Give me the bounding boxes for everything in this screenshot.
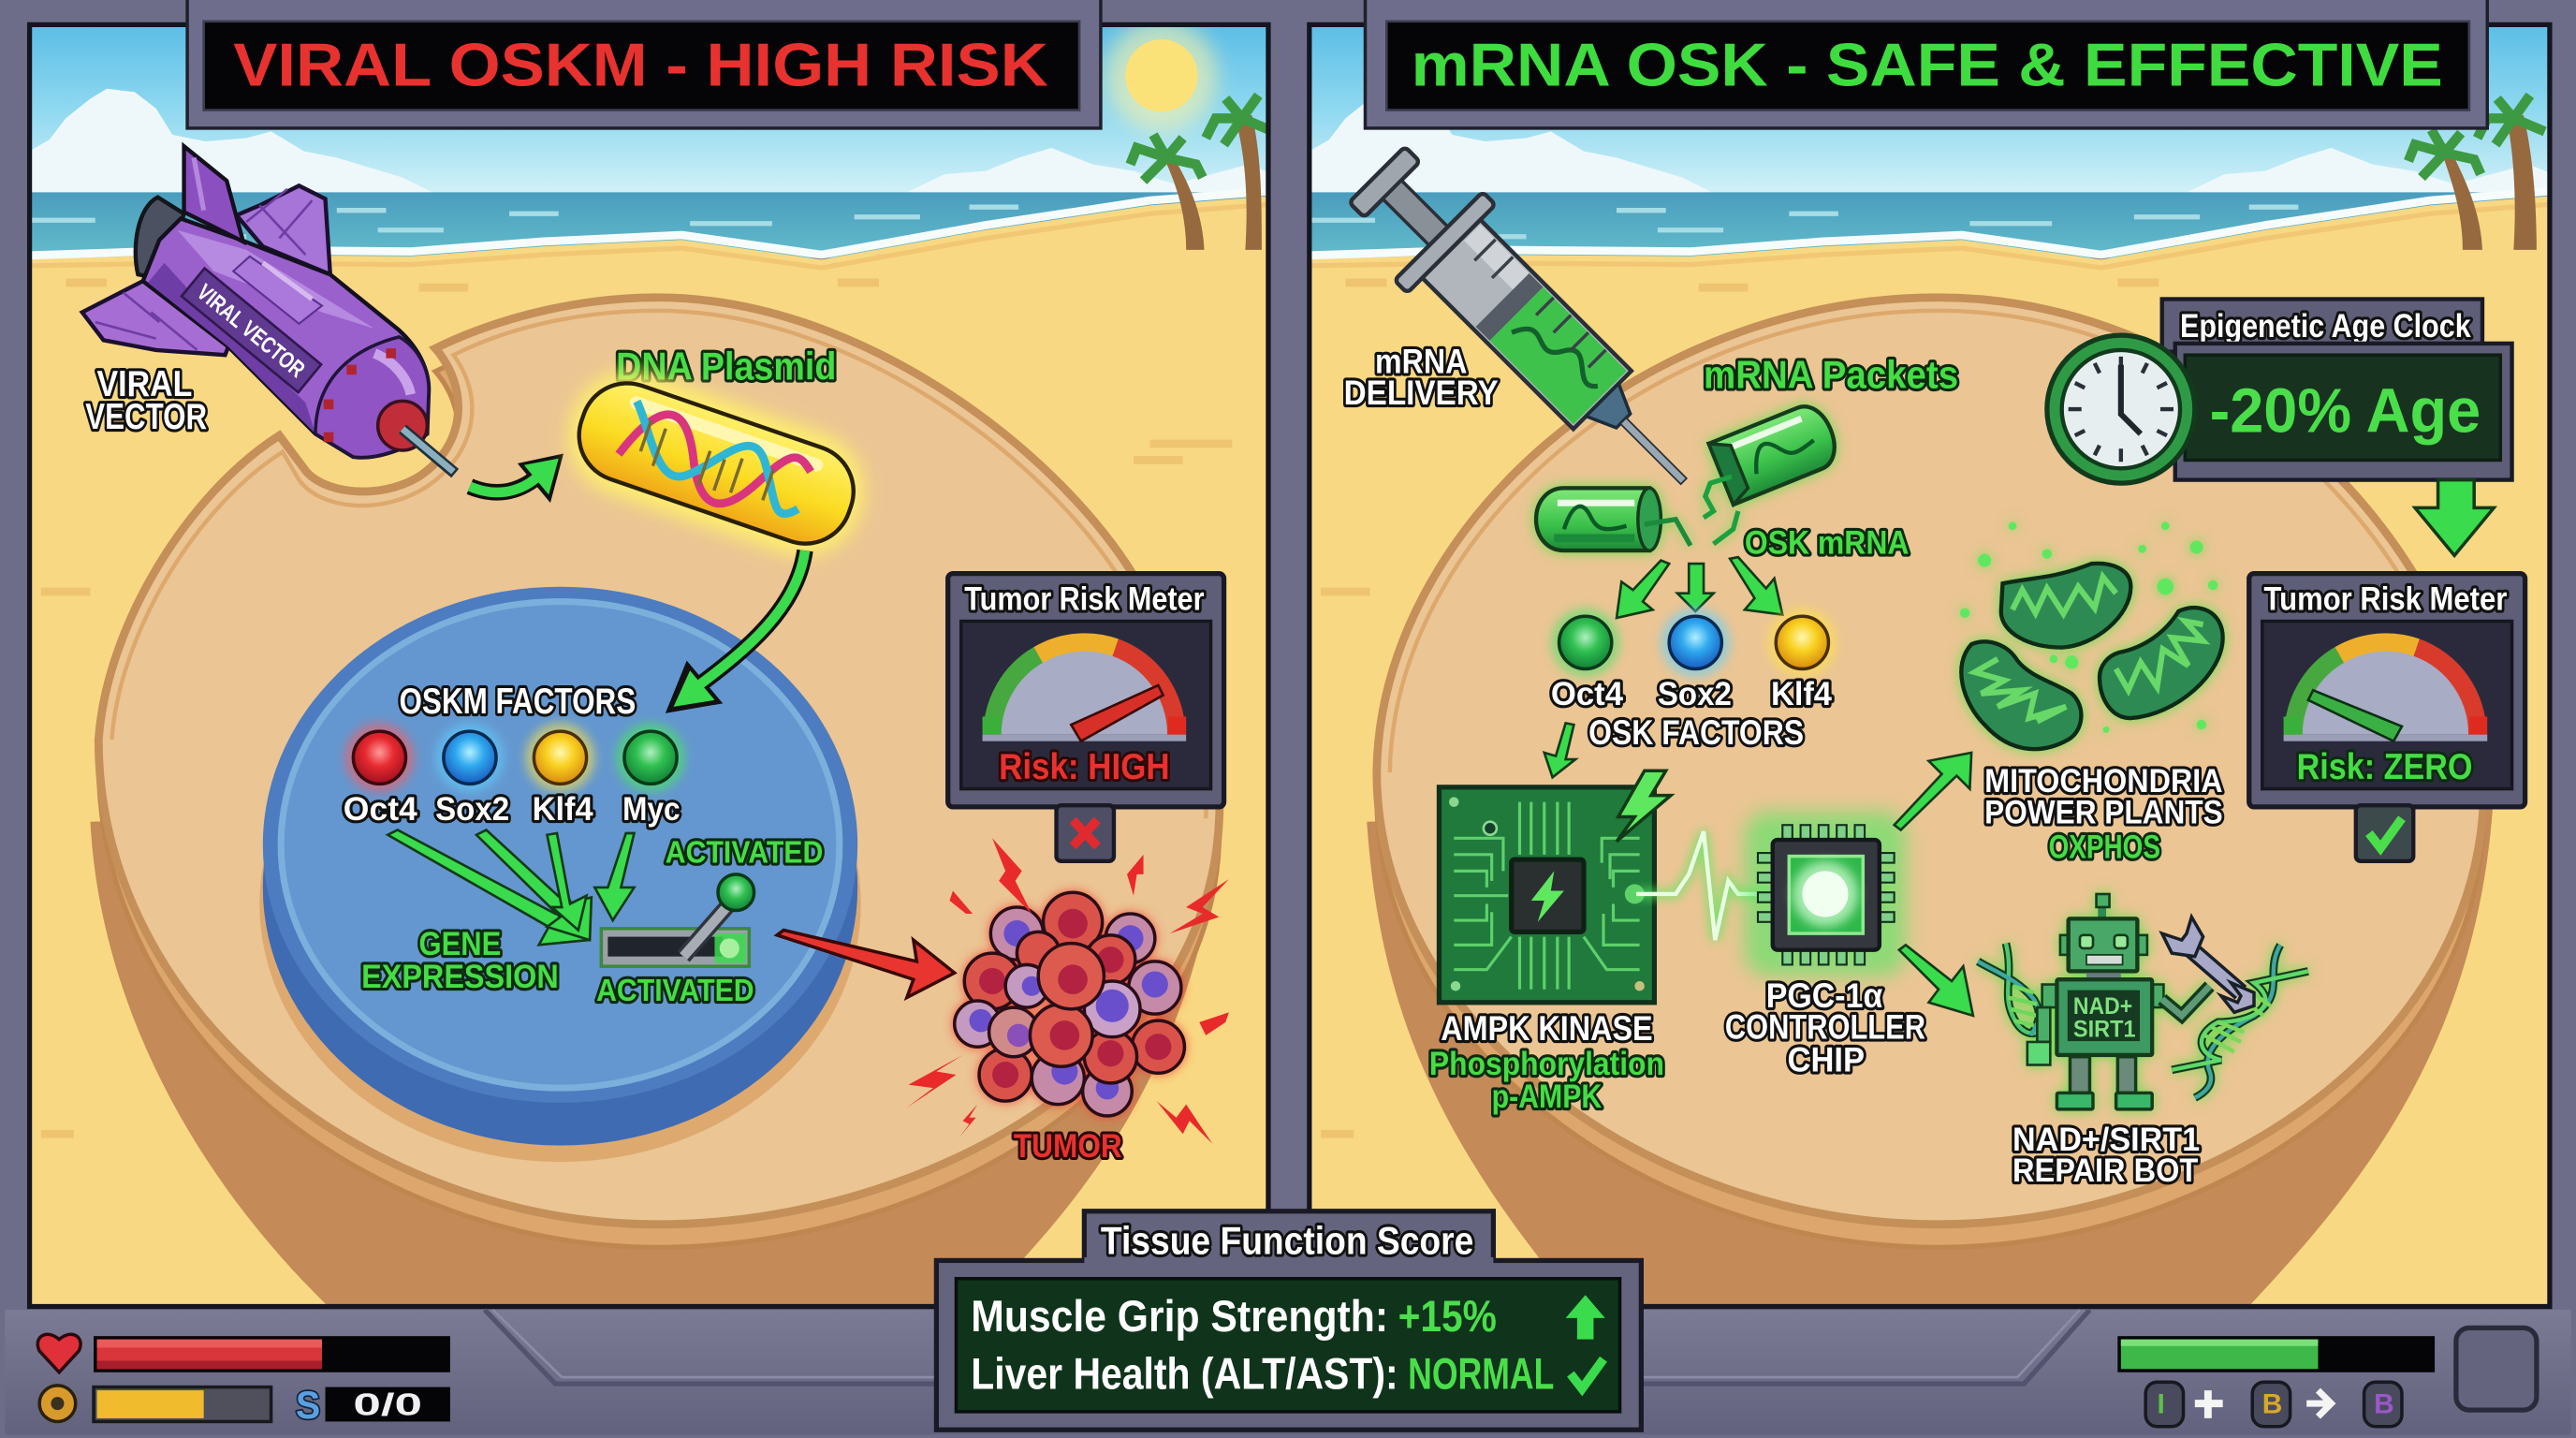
counter: 0/0 [353,1387,422,1422]
liver health row: NORMAL [1408,1349,1554,1399]
counter [326,1387,450,1422]
label: viral vector: VIRAL [97,364,192,404]
energy sparkles [1960,521,2217,733]
icon: tumor cluster [955,892,1184,1116]
labels: mitochondria [1984,763,2223,865]
input buttons: I [2157,1389,2165,1420]
OSK factor names: Klf4 [1771,676,1832,712]
beach backdrop left [0,0,1298,1314]
icon: syringe [1333,130,1728,525]
liver health row: Liver Health (ALT/AST): [971,1349,1398,1399]
cell shadow crescent right [1367,789,2494,1314]
arrows: factors to switch [388,829,634,945]
icon: red X badge [1057,805,1114,861]
factor names: Myc [622,791,681,828]
gauge zero [2284,642,2487,741]
icon: viral vector rocket [82,146,455,474]
panel: epigenetic age clock [2162,299,2512,480]
arrow: plasmid to nucleus [666,550,805,713]
icon: green check badge [2356,805,2413,861]
rocket nozzle [378,401,455,474]
label: viral vector: VECTOR [85,397,207,437]
icon: sun [1105,20,1218,131]
label: mRNA delivery: mRNA [1375,342,1467,380]
chest label: SIRT1 [2073,1018,2136,1043]
clock heading: Epigenetic Age Clock [2180,308,2471,345]
score heading: Tissue Function Score [1101,1218,1473,1262]
cell membrane [98,298,1220,1247]
meter title: Tumor Risk Meter [964,580,1205,617]
factor names: Klf4 [533,791,593,828]
label: tumor: TUMOR [1014,1128,1122,1165]
meter title right: Tumor Risk Meter [2264,580,2508,617]
title text: mRNA OSK - SAFE & EFFECTIVE [1412,30,2443,98]
labels: AMPK kinase [1429,1009,1664,1115]
label: DNA plasmid: DNA Plasmid [616,345,836,389]
beach backdrop right [1280,0,2576,1314]
labels: repair bot: NAD+/SIRT1 [2012,1122,2200,1158]
nucleus [259,587,861,1162]
panel: tumor risk meter zero [2249,574,2525,807]
factor names [344,791,681,828]
heading: OSKM factors: OSKM FACTORS [399,682,636,722]
OSK factor names [1551,676,1832,752]
labels: mitochondria: POWER PLANTS [1984,794,2223,830]
panel: mRNA OSK scene [1280,0,2576,1314]
icon: clock [2047,335,2195,483]
label: OSK mRNA: OSK mRNA [1745,525,1909,562]
icon: mRNA capsules [1536,400,1843,550]
labels: PGC-1 alpha controller chip: PGC-1α [1766,976,1883,1015]
labels: mitochondria: MITOCHONDRIA [1984,763,2223,800]
risk readout: Risk: HIGH [999,747,1170,787]
OSK factor orbs [1551,609,1837,677]
label: mRNA delivery: DELIVERY [1344,374,1499,412]
arrow: factors to AMPK [1544,723,1575,777]
chest label: NAD+ [2073,994,2132,1020]
panel: viral OSKM scene [0,0,1298,1314]
labels: AMPK kinase: Phosphorylation [1429,1046,1664,1082]
panel: tumor risk meter high [948,574,1224,807]
rocket hull label [182,269,321,392]
icon: PGC-1 alpha chip [1745,812,1906,976]
gauge high [983,642,1186,741]
labels: AMPK kinase: p-AMPK [1492,1078,1603,1115]
labels: PGC-1 alpha controller chip: CONTROLLER [1725,1007,1925,1046]
OSK factor names: OSK FACTORS [1588,713,1804,752]
icon: gene switch [601,874,754,966]
factor names: Sox2 [435,791,509,828]
label: mRNA delivery [1344,342,1499,412]
icon: repair robot [1978,894,2308,1109]
title text: VIRAL OSKM - HIGH RISK [233,30,1048,98]
icon: AMPK circuit board [1439,787,1654,1003]
input buttons: B [2262,1389,2282,1420]
cell membrane right [1377,298,2484,1247]
label: mRNA packets: mRNA Packets [1704,352,1958,396]
input buttons [2145,1382,2402,1427]
panel: tissue function score [936,1211,1641,1430]
grip strength row: Muscle Grip Strength: [971,1292,1388,1342]
icon: red sparks [907,838,1229,1144]
icon: mitochondria [1960,521,2223,749]
OSKM factor orbs [345,723,685,792]
age readout: -20% Age [2210,377,2481,447]
arrow: chip to repair bot [1899,945,1973,1016]
arrow: chip to mitochondria [1895,753,1971,829]
icon: coin gear [39,1386,76,1421]
factor names: Oct4 [344,791,417,828]
OSK factor names: Oct4 [1551,676,1624,712]
labels: gene expression and activated: GENE [419,926,501,962]
grip strength row: +15% [1398,1292,1497,1342]
chest label [2073,994,2136,1043]
icon: palm trees right [2408,95,2545,250]
HUD bar [5,1310,2571,1434]
arrow: clock to meter [2415,480,2494,555]
input buttons: B [2374,1389,2394,1420]
labels: PGC-1 alpha controller chip: CHIP [1788,1041,1865,1079]
label: viral vector [85,364,207,437]
rocket hull label: VIRAL VECTOR [192,280,310,383]
labels: gene expression and activated [361,836,823,1008]
icon: heartbeat signal [1636,831,1771,940]
labels: gene expression and activated: ACTIVATED [666,836,823,871]
labels: repair bot [2012,1122,2200,1189]
labels: PGC-1 alpha controller chip [1725,976,1925,1079]
icon: blue dollar: S [296,1383,320,1427]
title plate: mRNA OSK [1365,0,2487,128]
labels: gene expression and activated: ACTIVATED [596,974,754,1008]
arrow: switch to tumor [777,931,955,998]
arrow: vector to plasmid [470,453,564,503]
risk readout zero: Risk: ZERO [2297,747,2472,787]
labels: gene expression and activated: EXPRESSION [361,959,559,995]
OSK factor names: Sox2 [1658,676,1732,712]
labels: mitochondria: OXPHOS [2049,829,2160,865]
arrows: mRNA to factors [1617,557,1782,618]
labels: AMPK kinase: AMPK KINASE [1441,1009,1653,1048]
icon: heart [37,1334,80,1372]
icon: palm trees left [1131,95,1273,250]
icon: DNA plasmid capsule [553,355,880,572]
right DNA strand [2172,945,2308,1098]
cell shadow crescent [90,821,1198,1304]
icon: empty slot [2456,1328,2537,1410]
health bar [94,1336,450,1372]
energy bar [94,1387,271,1421]
progress bar [2117,1336,2435,1372]
title plate: viral OSKM [187,0,1101,128]
labels: repair bot: REPAIR BOT [2012,1152,2199,1189]
left DNA strand [1978,944,2039,1035]
icon: lightning bolt [1617,770,1671,842]
wrench [2162,917,2254,1012]
